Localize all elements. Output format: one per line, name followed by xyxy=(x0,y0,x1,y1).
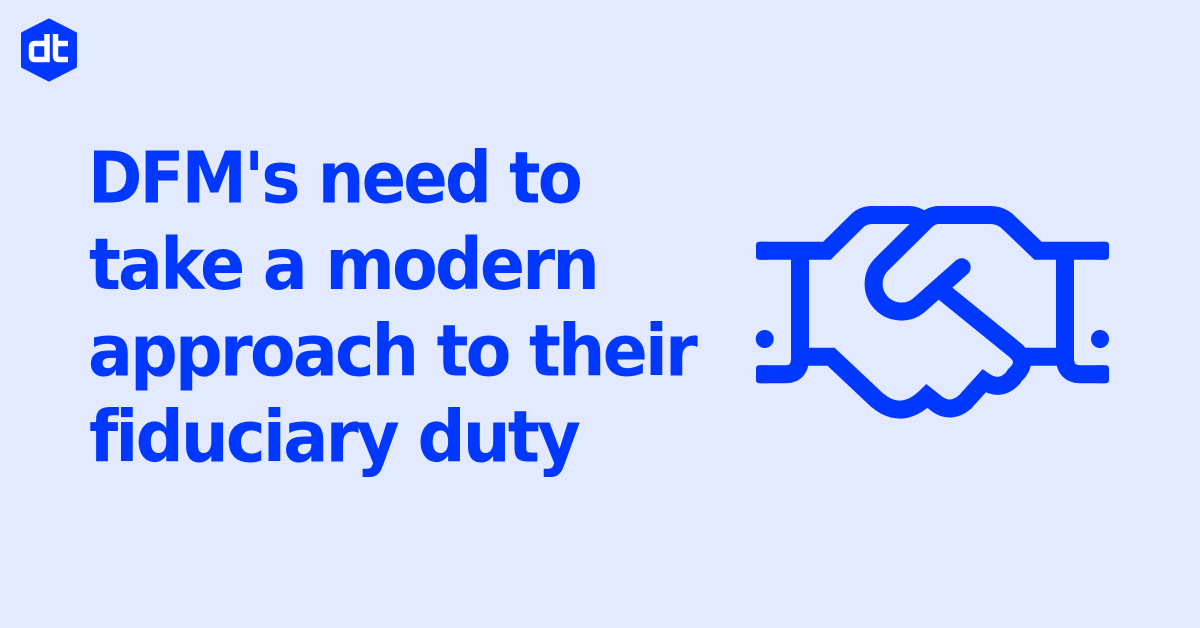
dots xyxy=(756,330,1109,348)
bar ends xyxy=(756,242,1109,383)
thumb end cap xyxy=(953,258,971,276)
logo: dt hexagon xyxy=(22,20,76,80)
title: DFM's need to xyxy=(88,137,580,220)
right wrist xyxy=(1065,250,1105,374)
title: approach to their xyxy=(88,309,698,392)
left wrist xyxy=(760,250,800,374)
icon: handshake xyxy=(756,215,1109,410)
title: take a modern xyxy=(89,223,597,306)
title: fiduciary duty xyxy=(89,396,580,479)
palm and fingers xyxy=(800,290,1022,410)
right palm line xyxy=(1019,348,1065,366)
title xyxy=(88,137,698,479)
left hand top xyxy=(760,215,923,251)
right hand and thumb xyxy=(874,215,1105,312)
